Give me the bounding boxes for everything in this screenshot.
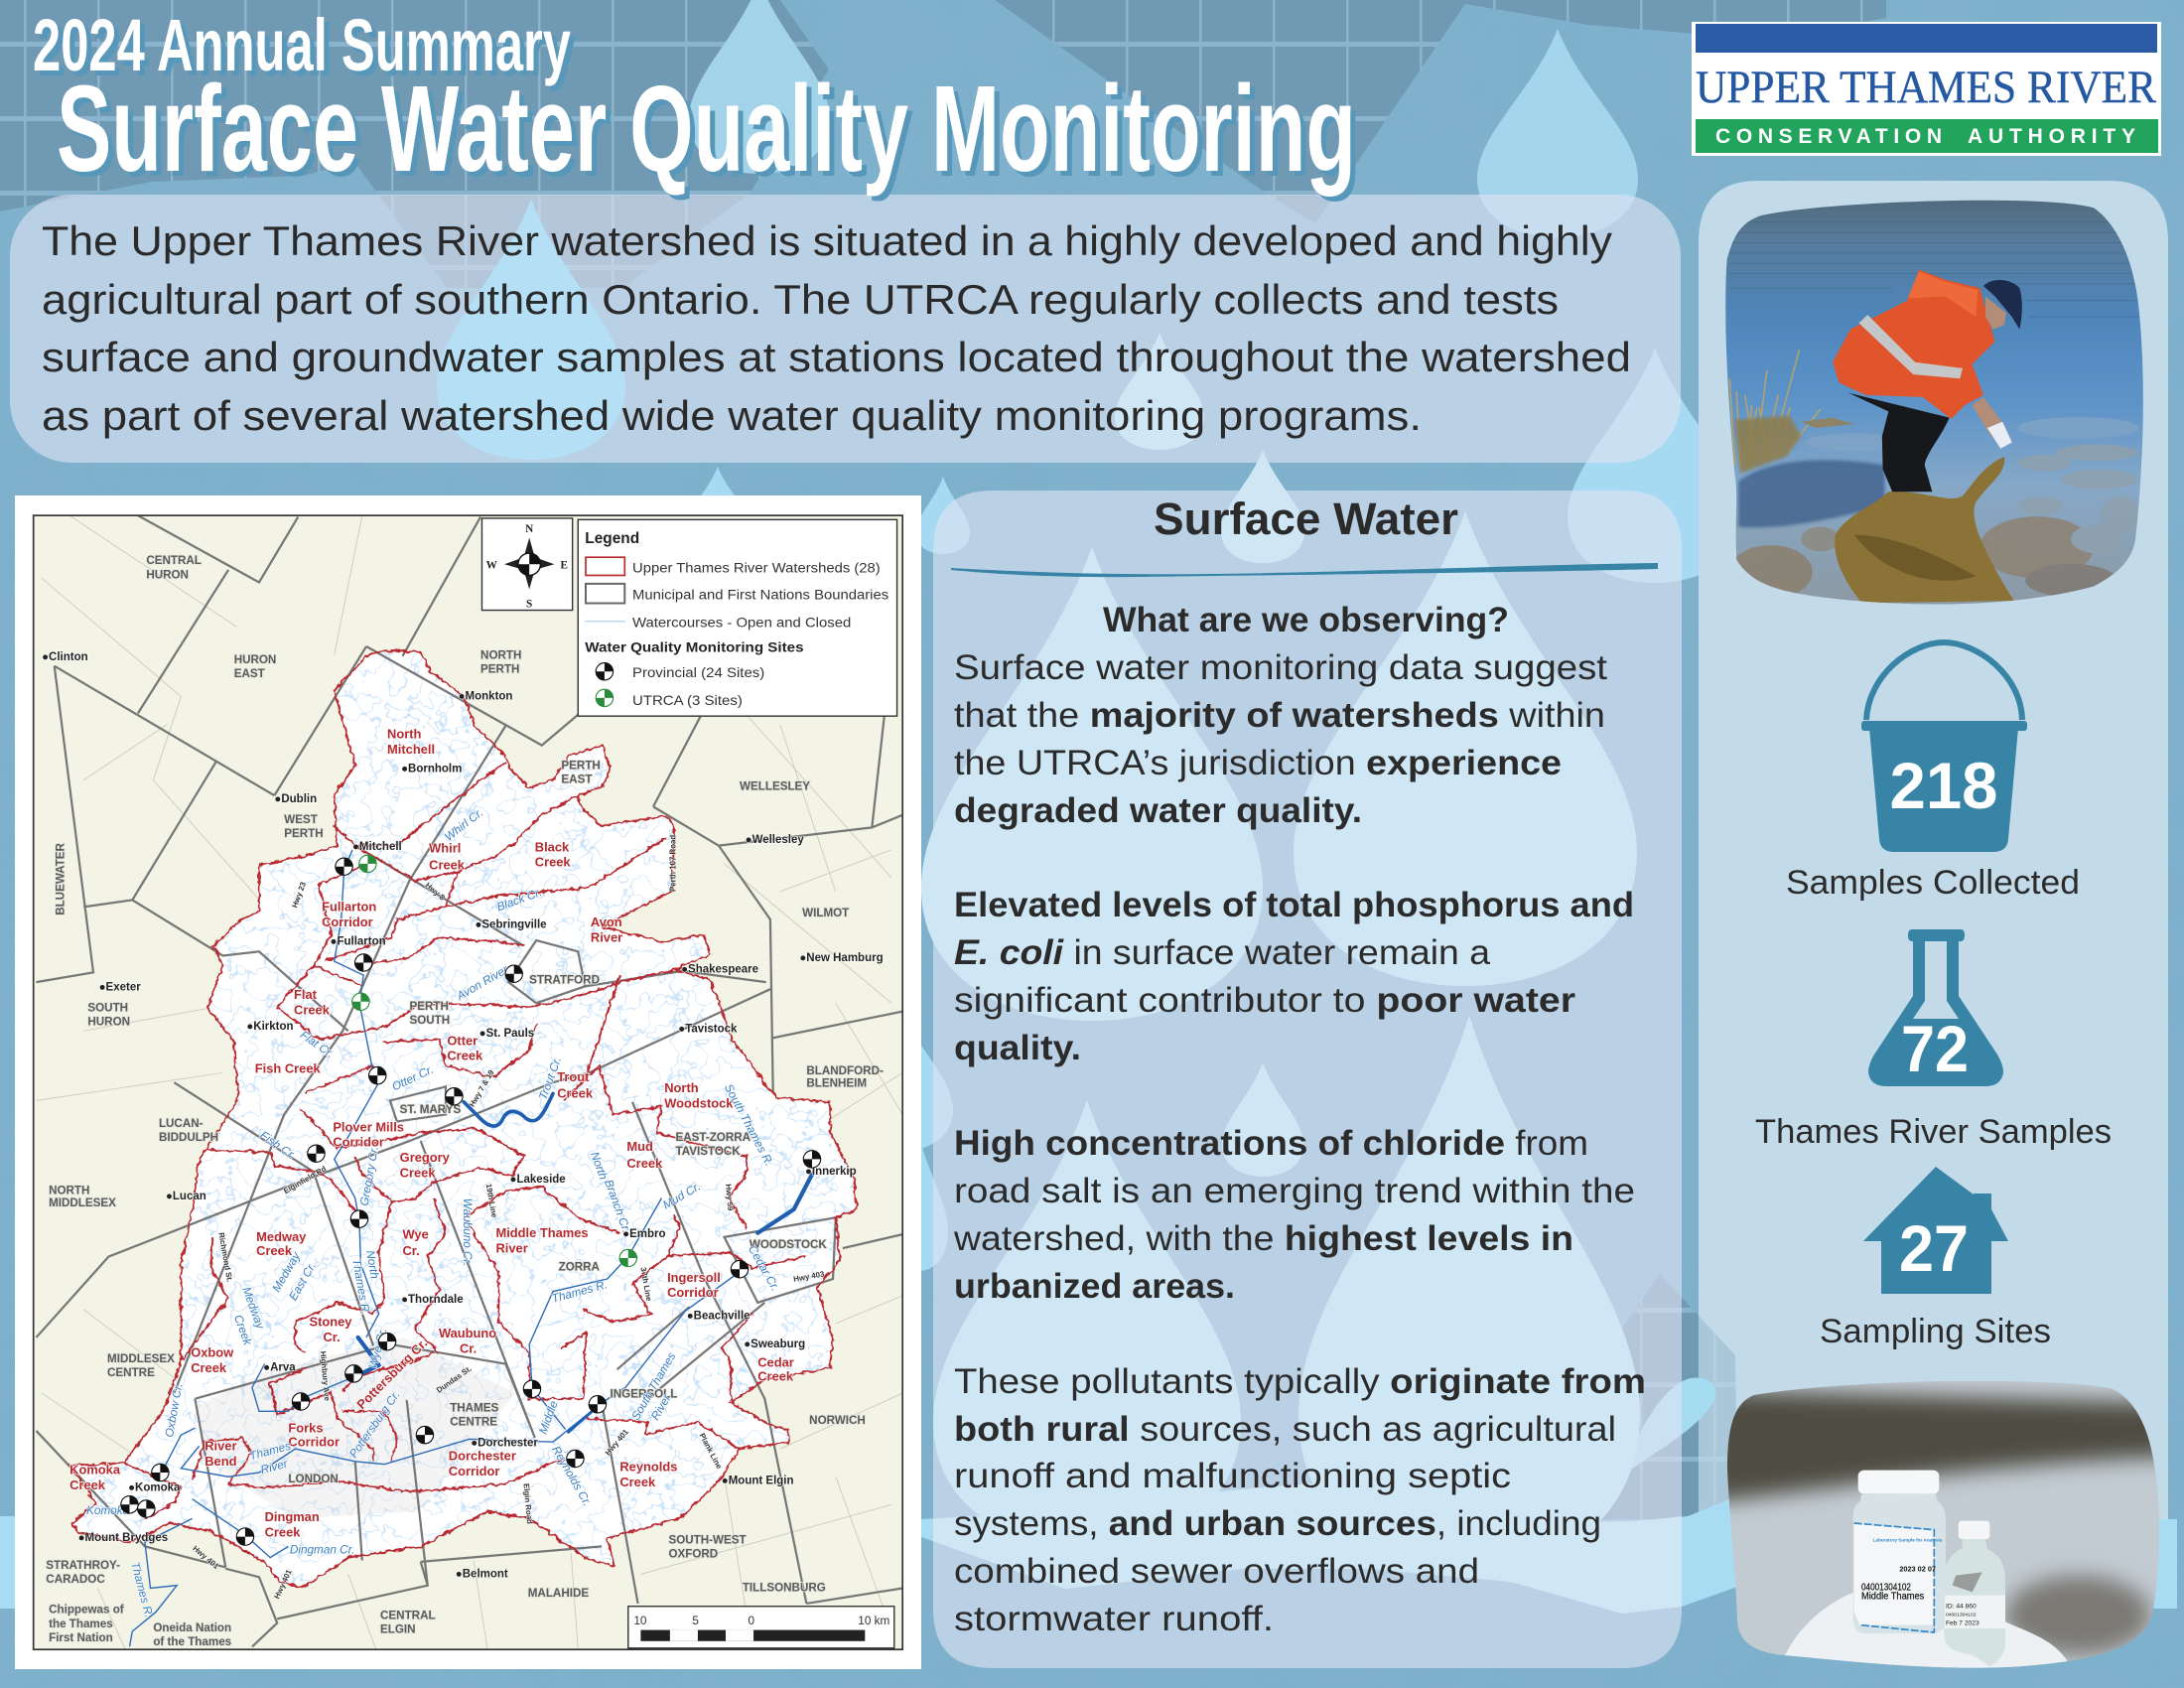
map labels: roads: Elginfield Rd (282, 1164, 328, 1196)
map labels: rivers: Oxbow Cr. (163, 1382, 186, 1438)
map labels: watersheds: Avon (591, 914, 622, 929)
map labels: rivers: Komoka (86, 1504, 130, 1517)
paragraph 4: runoff and malfunctioning septic (954, 1457, 1511, 1495)
map labels: watersheds: Waubuno (439, 1326, 496, 1340)
map labels: watersheds: Creek (191, 1360, 227, 1375)
map labels: rivers: Dingman Cr. (290, 1543, 354, 1556)
map labels: roads: Hwy 59 (724, 1184, 735, 1211)
sample bottle (1987, 422, 2012, 449)
map labels: municipalities: ELGIN (380, 1622, 416, 1635)
map labels: watersheds: Flat (294, 987, 318, 1002)
logo: Upper Thames River Conservation Authority: AUTHORITY (1968, 125, 2135, 148)
stat: samples collected (1786, 642, 2080, 902)
map labels: municipalities: CARADOC (46, 1573, 105, 1586)
map labels: rivers: Mud Cr. (661, 1180, 703, 1211)
map labels: rivers: South Thames (629, 1350, 679, 1423)
map labels: rivers: Medway (270, 1249, 304, 1295)
label: Thames River Samples (1755, 1113, 2112, 1151)
paragraph 3 (953, 1124, 1635, 1306)
main rivers (129, 850, 740, 1646)
map labels: watersheds: Trout (557, 1069, 590, 1084)
map: Upper Thames River watersheds (34, 515, 902, 1649)
icon: flask (1868, 929, 2003, 1086)
map labels: towns: ●Wellesley (746, 834, 804, 846)
map legend: Water Quality Monitoring Sites (585, 639, 804, 655)
map labels: towns: ●New Hamburg (799, 952, 884, 964)
map legend: Municipal and First Nations Boundaries (632, 587, 888, 602)
small bottle: Feb 7 2023 (1946, 1620, 1979, 1627)
paragraph 3: watershed, with the highest levels in (953, 1219, 1573, 1258)
paragraph 2: Elevated levels of total phosphorus and (954, 886, 1634, 924)
stat: sampling sites (1820, 1167, 2051, 1350)
map legend: Provincial (24 Sites) (632, 665, 764, 680)
label: Samples Collected (1786, 864, 2080, 902)
map labels: rivers: Thames R. (128, 1561, 155, 1619)
map labels: watersheds: Whirl (429, 841, 461, 856)
map labels: towns: ●Mitchell (352, 841, 402, 853)
map labels: watersheds: River (495, 1240, 528, 1255)
map labels: watersheds: Gregory (400, 1150, 451, 1165)
map labels: towns: ●Sweaburg (744, 1338, 805, 1350)
map labels: towns: ●Embro (622, 1228, 666, 1240)
intro text: The Upper Thames River watershed is situated in a highly developed and highly (42, 217, 1612, 264)
heading underline (951, 563, 1658, 577)
paragraph 1 (954, 648, 1607, 830)
map labels: municipalities: EAST (234, 667, 265, 680)
map labels: municipalities: PERTH (561, 759, 601, 772)
paragraph 3: High concentrations of chloride from (954, 1124, 1588, 1163)
map labels: roads: Hwy 403 (793, 1269, 826, 1284)
small bottle: 04001304102 (1946, 1612, 1977, 1618)
paragraph 4: both rural sources, such as agricultural (954, 1410, 1616, 1449)
map labels: rivers: South Thames R. (722, 1082, 775, 1169)
map labels: rivers: Otter Cr. (390, 1063, 436, 1093)
map labels: roads: Hwy 7 & 19 (468, 1068, 496, 1108)
map labels: watersheds: Komoka (69, 1462, 121, 1477)
map labels: municipalities: MIDDLESEX (49, 1196, 116, 1209)
number 72: 72 (1901, 1012, 1969, 1085)
map labels: watersheds: Creek (400, 1166, 436, 1181)
large jar: Laboratory Sample for Analysis (1873, 1538, 1943, 1543)
map labels: rivers: Cedar Cr. (746, 1243, 781, 1293)
map labels: municipalities: HURON (87, 1016, 130, 1029)
map labels: towns: ●Arva (263, 1362, 296, 1374)
map labels: towns: ●Tavistock (678, 1024, 738, 1036)
map labels: towns: ●Bornholm (401, 763, 462, 774)
subtitle: 2024 Annual Summary (33, 4, 571, 86)
map labels: rivers: Thames R. (550, 1278, 609, 1306)
map labels: towns: ●Monkton (459, 690, 512, 702)
shadow in water (1738, 460, 1885, 527)
compass rose: W (486, 559, 498, 571)
map labels: watersheds: River (205, 1439, 236, 1454)
map labels: rivers: Reynolds Cr. (549, 1444, 594, 1508)
map labels: rivers: Black Cr. (495, 886, 544, 914)
map labels: watersheds: Corridor (322, 914, 373, 929)
map labels: rivers: Creek (231, 1313, 254, 1347)
map legend (578, 519, 897, 716)
map labels: municipalities: PERTH (409, 1000, 449, 1013)
map labels: municipalities (46, 554, 884, 1648)
monitoring site markers (121, 855, 821, 1545)
watercourses (82, 651, 856, 1585)
map labels: municipalities: MALAHIDE (528, 1587, 589, 1600)
map labels: watersheds: Creek (256, 1243, 293, 1258)
map labels: municipalities: CENTRAL (380, 1609, 436, 1621)
map labels: towns: ●Lakeside (510, 1174, 566, 1186)
water ripples (1729, 222, 2139, 317)
map labels: towns: ●Exeter (99, 982, 141, 994)
map labels: watersheds: River (591, 929, 622, 944)
map labels: municipalities: of the Thames (153, 1635, 231, 1648)
main title: Surface Water Quality Monitoring (57, 62, 1356, 198)
large jar: 04001304102 (1861, 1583, 1911, 1594)
map labels: watersheds: Creek (294, 1002, 331, 1017)
map labels: municipalities: NORWICH (809, 1414, 866, 1427)
panel: right stats column (1699, 181, 2168, 1579)
map labels: towns: ●Kirkton (246, 1021, 294, 1033)
map labels: watersheds: Cr. (324, 1330, 341, 1344)
map labels: roads: Hwy 401 (604, 1427, 630, 1457)
map labels: towns: ●Belmont (456, 1568, 508, 1580)
map labels: watersheds: Pottersburg Cr. (353, 1336, 430, 1412)
map labels: roads: Hwy 23 (290, 880, 308, 909)
map labels: watersheds: Medway (256, 1229, 307, 1244)
municipal boundaries (36, 515, 902, 1646)
map labels: towns: ●Clinton (42, 651, 88, 663)
paragraph 1: the UTRCA’s jurisdiction experience (954, 744, 1562, 782)
map labels: municipalities: CENTRE (107, 1366, 155, 1379)
map labels: municipalities: STRATHROY- (46, 1559, 120, 1572)
map labels: watersheds: Fullarton (322, 900, 376, 914)
paragraph 4: stormwater runoff. (954, 1600, 1274, 1638)
map labels: roads: Hwy 8 (424, 881, 447, 903)
logo: Upper Thames River Conservation Authority: CONSERVATION (1715, 125, 1942, 148)
map scale bar (628, 1607, 894, 1648)
map labels: watersheds: Ingersoll (667, 1270, 721, 1285)
map labels: municipalities: MIDDLESEX (107, 1352, 175, 1365)
map labels: rivers: East Cr. (287, 1260, 319, 1303)
map labels: municipalities: BIDDULPH (159, 1131, 218, 1144)
map labels: towns: ●Innerkip (805, 1166, 857, 1178)
grass tuft (1729, 350, 1820, 465)
map labels: municipalities: HURON (146, 568, 189, 581)
label: Sampling Sites (1820, 1313, 2051, 1350)
map labels: roads (191, 835, 826, 1601)
jacket (1833, 269, 1994, 419)
map labels: watersheds: Bend (205, 1454, 237, 1469)
map labels: municipalities: LONDON (288, 1473, 339, 1485)
dark ground patch (2005, 1576, 2151, 1655)
map labels: watersheds: Woodstock (664, 1095, 734, 1110)
icon: house (1863, 1167, 2008, 1294)
map labels: watersheds: Oxbow (191, 1345, 234, 1360)
map labels: municipalities: EAST (561, 774, 592, 786)
map labels: roads: Hwy 401 (191, 1544, 221, 1571)
map labels: municipalities: HURON (234, 653, 276, 666)
snow mound (1784, 1589, 2072, 1668)
map labels: watersheds: Wye (402, 1226, 429, 1241)
subheading: What are we observing? (1103, 601, 1509, 639)
intro text: as part of several watershed wide water quality monitoring programs. (42, 392, 1422, 439)
map labels: rivers: Trout Cr. (537, 1055, 564, 1101)
map legend: Watercourses - Open and Closed (632, 615, 851, 630)
map labels: municipalities: First Nation (49, 1631, 113, 1644)
map scale bar: 10 km (858, 1615, 890, 1627)
map labels: municipalities: CENTRAL (146, 554, 202, 567)
map labels: watersheds: Dingman (265, 1509, 320, 1524)
map labels: towns: ●Fullarton (331, 935, 386, 947)
paragraph 2 (954, 886, 1634, 1067)
compass rose (481, 518, 573, 611)
paragraph 2: significant contributor to poor water (954, 981, 1575, 1020)
compass rose: N (525, 523, 533, 535)
map labels: watersheds: North (664, 1080, 699, 1095)
map labels: roads: Highbury Ave (319, 1350, 332, 1402)
paragraph 1: Surface water monitoring data suggest (954, 648, 1607, 687)
map labels: watersheds: Fish Creek (255, 1060, 322, 1075)
map labels: watersheds: Creek (557, 1086, 594, 1101)
map labels: municipalities: BLUEWATER (55, 842, 68, 915)
map labels: rivers: Fish Cr. (257, 1129, 298, 1163)
map labels: towns: ●St. Pauls (479, 1028, 534, 1040)
small bottle (1944, 1521, 2005, 1666)
number 27: 27 (1899, 1211, 1969, 1285)
map labels: municipalities: TILLSONBURG (743, 1581, 826, 1594)
blurred far shore (1707, 1390, 2177, 1502)
shallow cobbles (1729, 417, 2139, 599)
map labels: municipalities: STRATFORD (529, 974, 600, 987)
small bottle: ID: 44 860 (1946, 1603, 1977, 1610)
map labels: watersheds: Plover Mills (333, 1119, 404, 1134)
map labels: rivers: Thames (248, 1440, 292, 1463)
map labels: municipalities: EAST-ZORRA- (675, 1131, 754, 1144)
paragraph 4: These pollutants typically originate from (954, 1362, 1646, 1401)
map labels: towns: ●Dorchester (471, 1437, 538, 1449)
map labels: rivers: North (588, 1150, 610, 1182)
thin roads (36, 515, 902, 1649)
map labels: watersheds: Creek (265, 1525, 301, 1540)
reflective stripes (1858, 315, 1963, 378)
map labels: rivers: Medway (239, 1285, 267, 1332)
logo: Upper Thames River Conservation Authority (1692, 22, 2161, 156)
map labels: watersheds: Mud (626, 1139, 653, 1154)
map labels: watersheds: Creek (535, 855, 571, 870)
map labels: municipalities: ST. MARYS (400, 1103, 461, 1116)
map labels: watersheds: Creek (447, 1049, 483, 1063)
map labels: municipalities: PERTH (480, 663, 519, 676)
map scale bar: 10 (633, 1615, 647, 1627)
map labels: roads: 19th Line (484, 1183, 499, 1218)
map labels: watersheds: Otter (447, 1033, 478, 1048)
map labels: watersheds: Mitchell (387, 742, 435, 757)
map labels: municipalities: OXFORD (668, 1548, 718, 1561)
background wave (0, 1479, 2177, 1614)
map labels: towns: ●Lucan (166, 1191, 206, 1202)
map labels: municipalities: BLENHEIM (806, 1076, 867, 1089)
map labels: rivers: Wye Cr. (366, 1327, 390, 1370)
map labels: municipalities: SOUTH (87, 1002, 128, 1015)
map labels: municipalities: PERTH (284, 827, 324, 840)
map labels: municipalities: LUCAN- (159, 1117, 204, 1130)
map labels: watersheds: Corridor (667, 1285, 719, 1300)
large jar: 2023 02 07 (1899, 1565, 1936, 1574)
map labels: rivers: Middle (537, 1399, 561, 1436)
panel: introduction (10, 195, 1681, 463)
title block (33, 4, 1356, 198)
background water drops (688, 0, 1742, 1271)
map scale bar: 0 (748, 1615, 754, 1627)
map labels: towns: ●Mount Brydges (78, 1532, 168, 1544)
background grid band (0, 0, 1886, 1519)
map labels: rivers (86, 806, 781, 1619)
map labels: roads: Dundas St. (435, 1364, 474, 1395)
map labels: rivers: Whirl Cr. (443, 806, 485, 844)
map labels: watersheds: Reynolds (619, 1460, 677, 1475)
paragraph 1: that the majority of watersheds within (954, 696, 1605, 735)
decorative drop tail (1621, 1377, 1715, 1477)
submerged rock and reflection (1835, 457, 2014, 603)
map labels: rivers: Thames R. (349, 1258, 372, 1317)
map labels: rivers: Avon River (454, 963, 511, 1003)
map labels: municipalities: INGERSOLL (611, 1387, 677, 1400)
map labels: municipalities: NORTH (480, 649, 521, 662)
map labels: rivers: Flat Cr. (298, 1029, 337, 1060)
compass rose: S (526, 599, 532, 611)
paragraph 2: E. coli in surface water remain a (954, 933, 1491, 972)
map labels: roads: Plank Line (698, 1432, 724, 1471)
map labels: municipalities: TAVISTOCK (675, 1145, 741, 1158)
legs (1848, 393, 1950, 492)
map labels: municipalities: Chippewas of (49, 1604, 124, 1617)
map labels: towns: ●Beachville (687, 1311, 751, 1323)
photo: sample bottles on snow (1707, 1373, 2177, 1675)
map labels: rivers: River (259, 1457, 290, 1477)
head and cap (1985, 296, 2006, 330)
map labels: watersheds: Corridor (288, 1434, 340, 1449)
forearm (1973, 397, 2006, 436)
map labels: municipalities: WEST (284, 813, 318, 826)
map labels: towns (42, 651, 884, 1580)
large jar: Middle Thames (1861, 1592, 1924, 1603)
map labels: rivers: River (649, 1391, 674, 1423)
lighter drops inside panel (921, 450, 1682, 1614)
map labels: municipalities: SOUTH (409, 1014, 450, 1027)
map labels: municipalities: WOODSTOCK (750, 1238, 827, 1251)
map labels: municipalities: CENTRE (450, 1415, 497, 1428)
map legend: Upper Thames River Watersheds (28) (632, 561, 881, 576)
intro text: agricultural part of southern Ontario. The UTRCA regularly collects and tests (42, 276, 1559, 323)
watershed boundaries (69, 650, 857, 1588)
map labels: watersheds: Cr. (402, 1243, 420, 1258)
map labels: rivers: Pottersburg Cr. (347, 1388, 403, 1461)
map labels: watersheds: North (387, 727, 422, 742)
map labels: municipalities: ZORRA (559, 1261, 601, 1274)
map labels: towns: ●Dublin (274, 793, 317, 805)
stat: Thames River samples (1755, 929, 2112, 1151)
map labels: municipalities: THAMES (450, 1401, 499, 1414)
paragraph 1: degraded water quality. (954, 791, 1362, 830)
large jar (1853, 1471, 1946, 1633)
watershed area (69, 650, 857, 1588)
paragraph 2: quality. (954, 1029, 1081, 1067)
map labels: municipalities: WELLESLEY (740, 780, 810, 793)
compass rose: E (560, 559, 568, 571)
map labels: towns: ●Mount Elgin (722, 1475, 794, 1486)
paragraph 3: road salt is an emerging trend within the (954, 1172, 1635, 1210)
map labels: municipalities: NORTH (49, 1184, 89, 1196)
map labels: roads: Hwy 401 (272, 1568, 294, 1601)
intro text (42, 217, 1631, 439)
map labels: watersheds (69, 727, 794, 1540)
map labels: rivers: North (363, 1249, 381, 1280)
number 218: 218 (1890, 749, 1997, 822)
icon: bucket (1861, 642, 2027, 852)
heading: Surface Water: Surface Water (1154, 493, 1458, 544)
map legend: UTRCA (3 Sites) (632, 693, 743, 708)
map labels: watersheds: Creek (69, 1477, 106, 1492)
decorative drop (437, 199, 625, 460)
map labels: towns: ●Komoka (128, 1481, 181, 1493)
map labels: watersheds: Corridor (449, 1464, 499, 1478)
map labels: roads: Richmond St. (216, 1231, 234, 1283)
paragraph 4: combined sewer overflows and (954, 1552, 1479, 1591)
map labels: rivers: Branch Cr. (602, 1178, 632, 1234)
paragraph 3: urbanized areas. (954, 1267, 1235, 1306)
map labels: municipalities: the Thames (49, 1618, 113, 1630)
map labels: municipalities: WILMOT (802, 907, 849, 919)
map labels: rivers: Gregory Cr. (358, 1145, 381, 1207)
map labels: watersheds: Stoney (309, 1315, 352, 1330)
paragraph 4: systems, and urban sources , including (954, 1504, 1601, 1543)
map labels: rivers: Waubuno Cr. (461, 1198, 474, 1266)
map labels: watersheds: Black (535, 839, 570, 854)
intro text: surface and groundwater samples at stations located throughout the watershed (42, 334, 1631, 380)
map labels: watersheds: Middle Thames (495, 1225, 589, 1240)
map labels: watersheds: Cedar (757, 1354, 794, 1369)
map labels: towns: ●Sebringville (475, 918, 547, 930)
decorative drop small (1115, 333, 1204, 450)
map labels: watersheds: Forks (288, 1420, 324, 1435)
panel: surface water (921, 450, 1682, 1668)
bold river reaches (355, 1093, 812, 1432)
map card (15, 495, 921, 1669)
map labels: watersheds: Creek (429, 858, 466, 873)
map legend: Legend (585, 530, 639, 547)
map labels: roads: Elgin Road (522, 1483, 534, 1524)
map labels: roads: 37th Line (638, 1267, 653, 1303)
map labels: municipalities: BLANDFORD- (806, 1064, 884, 1077)
map labels: watersheds: Cr. (460, 1340, 477, 1355)
logo: Upper Thames River Conservation Authority: UPPER THAMES RIVER (1696, 62, 2157, 113)
map labels: roads: Perth 107 Road (668, 835, 677, 892)
map labels: watersheds: Dorchester (449, 1448, 516, 1463)
map labels: watersheds: Creek (626, 1156, 663, 1171)
map labels: towns: ●Thorndale (401, 1294, 464, 1306)
map labels: watersheds: Corridor (333, 1135, 384, 1150)
map labels: municipalities: Oneida Nation (153, 1621, 231, 1634)
map labels: watersheds: Creek (619, 1475, 656, 1489)
map labels: towns: ●Shakespeare (681, 963, 758, 975)
map labels: municipalities: SOUTH-WEST (668, 1534, 747, 1547)
paragraph 4 (954, 1362, 1646, 1638)
photo: technician sampling river water (1717, 190, 2150, 613)
map scale bar: 5 (692, 1615, 699, 1627)
map labels: watersheds: Creek (757, 1368, 794, 1383)
